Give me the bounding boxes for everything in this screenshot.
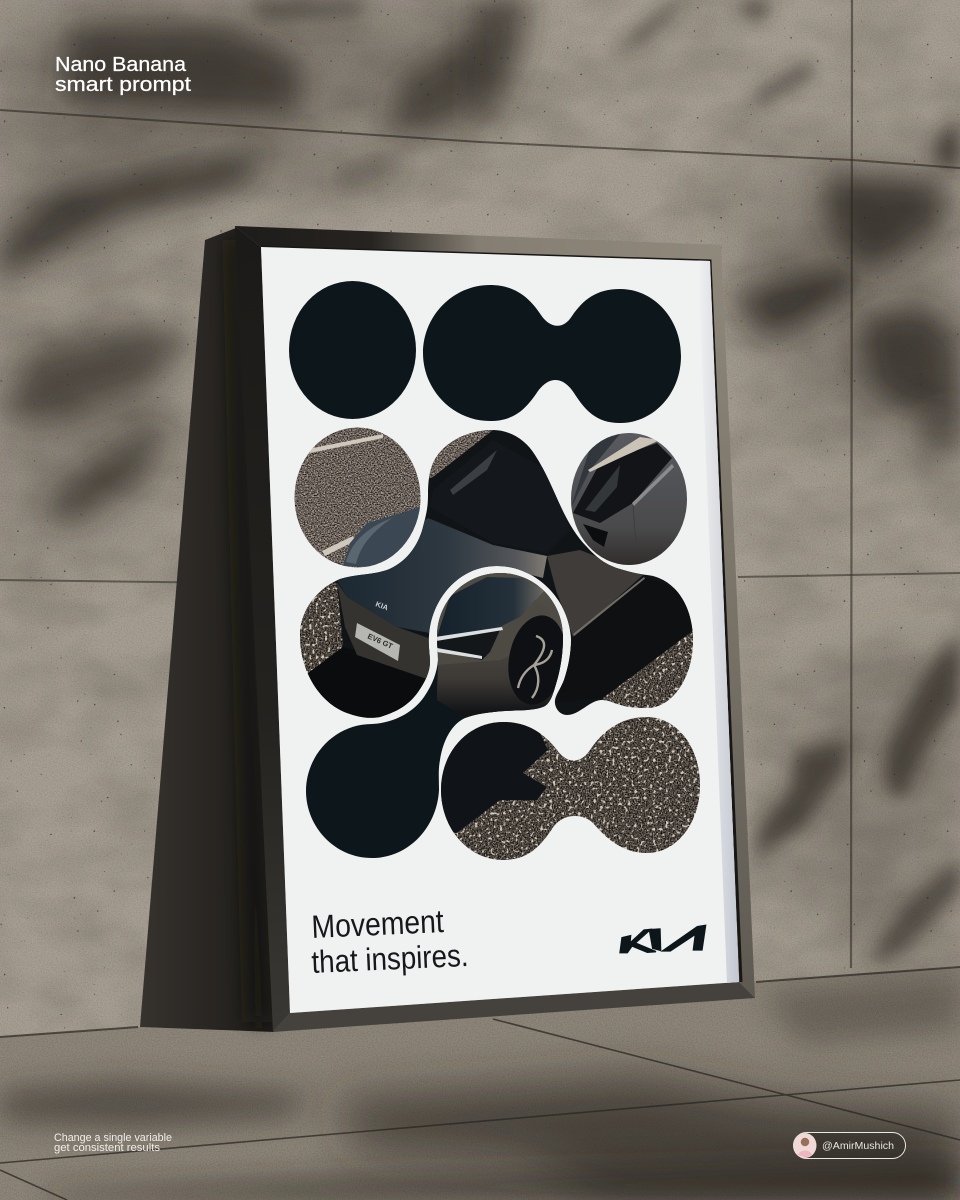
photo: car side window bbox=[571, 433, 687, 565]
floor slab joints bbox=[0, 1019, 960, 1200]
footer note: get consistent results bbox=[54, 1142, 160, 1154]
brand title: Nano Banana bbox=[55, 53, 187, 76]
photo circle: road and hood bbox=[294, 428, 420, 568]
dark car and black circle blob, row 3-4 bbox=[306, 573, 563, 858]
cast shadow of frame bbox=[140, 228, 274, 1032]
photo dumbbell: asphalt bbox=[435, 712, 705, 864]
footer note: Change a single variable bbox=[54, 1132, 172, 1144]
Kia logo bbox=[620, 925, 706, 953]
poster tagline: Movement bbox=[311, 903, 445, 945]
photo blob: car body: EV6 GT bbox=[366, 632, 395, 651]
black dumbbell, row 1 bbox=[423, 285, 681, 423]
avatar bbox=[794, 1133, 816, 1158]
brand title bbox=[55, 53, 191, 96]
poster tagline bbox=[311, 903, 469, 980]
author badge bbox=[794, 1132, 906, 1158]
poster frame bbox=[235, 226, 755, 1032]
brand title: smart prompt bbox=[55, 73, 191, 96]
black circle, row 1 bbox=[289, 281, 416, 419]
photo blob: car body bbox=[290, 425, 705, 725]
poster tagline: that inspires. bbox=[311, 938, 469, 980]
panel: graphic shapes bbox=[289, 281, 705, 864]
handle: @AmirMushich bbox=[822, 1140, 894, 1152]
photo blob: car body: KIA bbox=[374, 599, 390, 612]
photo: car fender, headlight and wheel bbox=[437, 573, 563, 718]
poster paper bbox=[261, 247, 739, 1013]
concrete floor bbox=[0, 967, 960, 1200]
footer note bbox=[54, 1132, 172, 1154]
